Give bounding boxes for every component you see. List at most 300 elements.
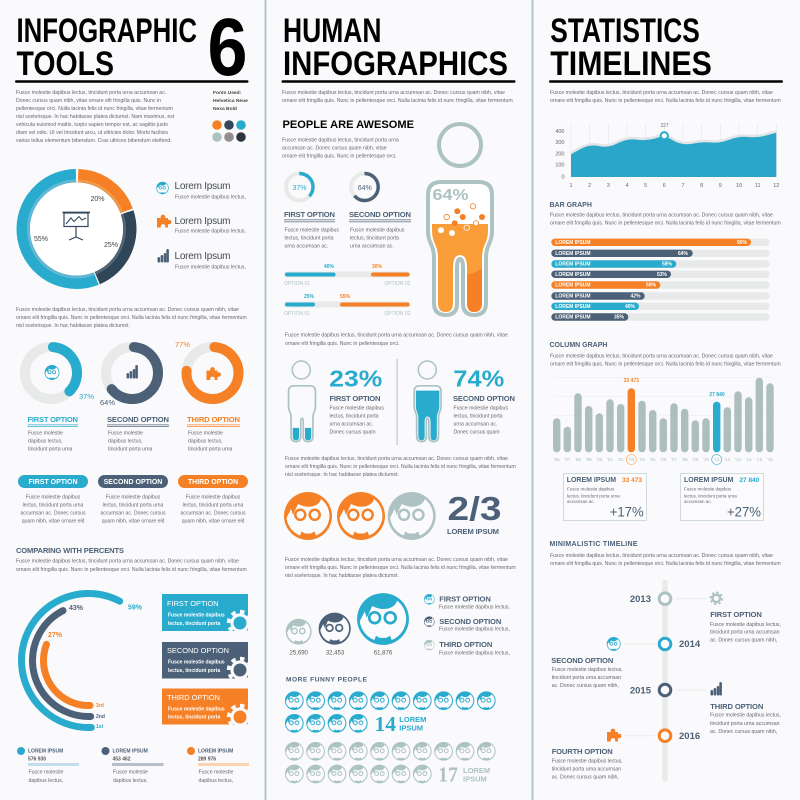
stat box: 33 473: Fusce molestie dapibus — [567, 487, 615, 492]
title: statistics timelines: STATISTICS — [550, 12, 700, 50]
count: 14: IPSUM — [399, 724, 423, 732]
progress bar 2: 25% — [304, 294, 315, 300]
progress bar 2: OPTION 01 — [284, 311, 310, 317]
column graph: '97 — [564, 457, 571, 462]
timeline entry: first option — [710, 610, 781, 644]
timeline entry: second option: ac. Donec cursus quam nibh, — [552, 683, 619, 689]
title: statistics timelines — [549, 12, 783, 83]
column graph: '03 — [628, 457, 635, 462]
stat: 23%: Donec cursus quam — [330, 429, 376, 435]
option text: lectus, tincidunt porta — [350, 236, 399, 242]
radial labels: 1st — [96, 724, 104, 730]
text block: Fusce molestie dapibus lectus, tincidunt porta urna accumsan ac. Donec cursus quam nibh, vitae — [285, 456, 508, 462]
area chart: 200 — [555, 152, 564, 158]
column graph — [553, 378, 774, 464]
option text: dapibus lectus, — [28, 439, 63, 445]
stat box: 27 840: lectus, tincidunt porta urna — [684, 493, 737, 498]
bar graph: LOREM IPSUM — [555, 283, 591, 289]
timeline axis — [625, 580, 706, 782]
area chart: 2 — [588, 183, 591, 189]
count: 17 — [438, 762, 490, 786]
area chart — [555, 123, 779, 189]
timeline entry: second option: SECOND OPTION — [551, 656, 613, 665]
stat: 74%: Fusce molestie dapibus — [454, 405, 508, 411]
option text — [284, 228, 405, 250]
count: 14 — [374, 712, 426, 736]
option box: first — [162, 594, 251, 634]
area chart: 300 — [555, 140, 564, 146]
column graph: '14 — [746, 457, 752, 462]
area chart: 12 — [773, 183, 779, 189]
pill text: lectus, tincidunt porta urna — [23, 503, 84, 509]
intro text: Fusce molestie dapibus lectus, tincidunt porta urna accumsan ac. Donec cursus quam nibh, vitae — [550, 90, 773, 96]
timeline entry: third option: Fusce molestie dapibus lectus, — [710, 713, 781, 719]
column graph text — [550, 354, 781, 368]
stat: 74% — [453, 366, 515, 435]
timeline entry: fourth option: Fusce molestie dapibus lectus, — [552, 759, 623, 765]
intro text: pellentesque orci. Nulla lacinia felis id nunc fringilla, vitae fermentum — [16, 106, 173, 112]
face legend: FIRST OPTION — [439, 595, 491, 604]
intro text: diam vel odio. Ut vel tincidunt arcu, ut ultricies dolor. Morbi facilisis — [16, 130, 168, 136]
pill text: quam nibh, vitae ornare elit — [182, 519, 245, 525]
icon: bars — [710, 682, 722, 696]
title: infographic tools: INFOGRAPHIC — [16, 12, 197, 50]
option box: second: SECOND OPTION — [167, 646, 229, 655]
area chart: 4 — [625, 183, 629, 189]
intro text: varius tellus elementum bibendum. Cras ultrices bibendum eleifend. — [16, 138, 172, 144]
timeline years: 2013 — [630, 594, 651, 605]
timeline entry: fourth option: FOURTH OPTION — [552, 747, 613, 756]
fonts used note — [213, 90, 248, 112]
stat: 23%: lectus, tincidunt porta — [330, 413, 379, 419]
pill text: Fusce molestie dapibus — [106, 495, 161, 501]
column graph: '00 — [596, 457, 603, 462]
stat: 74%: SECOND OPTION — [453, 394, 515, 403]
option box: first: FIRST OPTION — [167, 599, 219, 608]
stat box: 27 840: Fusce molestie dapibus — [684, 487, 732, 492]
donut labels: 25% — [104, 242, 118, 249]
timeline entry: fourth option: ac. Donec cursus quam nibh, — [552, 775, 619, 781]
area chart: 7 — [681, 183, 685, 189]
donut labels — [34, 196, 118, 249]
ring chart: third option — [175, 340, 241, 402]
face legend: SECOND OPTION — [439, 617, 501, 626]
bar graph: 64% — [678, 251, 689, 257]
column graph: '09 — [692, 457, 699, 462]
timeline entry: third option: ac. Donec cursus quam nibh, — [710, 729, 777, 735]
text block: nisl scelerisque. In hac habitasse platea dictumst. — [16, 323, 130, 329]
option pills: THIRD OPTION — [188, 479, 238, 486]
column graph: '99 — [586, 457, 592, 462]
stat: 74%: Donec cursus quam — [454, 429, 500, 435]
stat: 2/3 — [447, 490, 502, 536]
option text: Fusce molestie dapibus — [350, 228, 405, 234]
timeline entry: second option: Fusce molestie dapibus lectus, — [552, 667, 623, 673]
radial labels: 3rd — [96, 703, 104, 709]
option pills — [18, 475, 248, 488]
progress bar 1: 40% — [324, 264, 335, 270]
people text: ornare elit fringilla quis. Nunc in pellentesque orci. — [282, 154, 396, 160]
panel: human infographics — [282, 12, 516, 786]
person: first option — [289, 361, 315, 442]
panel: statistics timelines — [549, 12, 783, 782]
stat box: 33 473: LOREM IPSUM — [567, 477, 616, 484]
count: 17: IPSUM — [463, 774, 487, 784]
big number 6: 6 — [208, 2, 248, 93]
progress bar 2: 55% — [340, 294, 351, 300]
pill text: lectus, tincidunt porta urna — [183, 503, 244, 509]
donut chart — [6, 158, 147, 300]
title: infographic tools: TOOLS — [16, 45, 114, 83]
legend: Fusce molestie dapibus lectus, — [175, 264, 246, 270]
text block — [285, 557, 516, 579]
option box: first: Fusce molestie dapibus — [168, 613, 225, 619]
column graph: '04 — [639, 457, 645, 462]
column graph: '96 — [554, 457, 560, 462]
option text: urna accumsan ac. — [350, 244, 394, 250]
column graph: '16 — [767, 457, 773, 462]
text block: ornare elit fringilla quis. Nunc in pellentesque orci. Nulla lacinia felis id nunc fringilla, vitae fermentum — [285, 464, 516, 470]
pill text: Fusce molestie dapibus — [186, 495, 241, 501]
large person figure — [428, 124, 492, 320]
bar graph text: ornare elit fringilla quis. Nunc in pellentesque orci. Nulla lacinia felis id nunc fringilla, vitae fermentum — [550, 221, 781, 227]
stat box: 27 840: 27 840 — [739, 477, 760, 484]
faces: two of three — [284, 492, 436, 540]
ring chart: first option — [22, 344, 94, 402]
intro text — [550, 90, 781, 104]
intro text: Donec cursus quam nibh, vitae ornare elit fringilla quis. Nunc in — [16, 98, 161, 104]
option box: third: THIRD OPTION — [167, 693, 220, 702]
bar graph: 42% — [630, 294, 641, 300]
people text — [282, 138, 399, 160]
stats row: LOREM IPSUM — [112, 749, 148, 755]
timeline entry: third option: tincidunt porta urna accumsan — [710, 721, 780, 727]
option box: second — [162, 642, 251, 681]
face size comparison: 61,876 — [374, 650, 393, 656]
timeline text — [550, 553, 781, 567]
option headings: SECOND OPTION — [107, 415, 169, 424]
pill text: lectus, tincidunt porta urna — [103, 503, 164, 509]
pill text: quam nibh, vitae ornare elit — [102, 519, 165, 525]
timeline years: 2014 — [679, 639, 701, 650]
column graph text: ornare elit fringilla quis. Nunc in pellentesque orci. Nulla lacinia felis id nunc fringilla, vitae fermentum — [550, 362, 781, 368]
column graph: '12 — [724, 457, 731, 462]
stats row: LOREM IPSUM — [28, 749, 63, 755]
radial labels: 27% — [48, 632, 63, 639]
option text — [28, 431, 233, 453]
face legend: THIRD OPTION — [439, 640, 492, 649]
text block — [285, 333, 508, 347]
icon: puzzle — [607, 729, 621, 742]
title: human infographics: INFOGRAPHICS — [283, 45, 508, 83]
radial labels: 43% — [69, 605, 84, 612]
option text: urna accumsan ac. — [284, 244, 328, 250]
option pills: FIRST OPTION — [28, 479, 78, 486]
option text: Fusce molestie dapibus — [284, 228, 339, 234]
text block — [285, 456, 516, 478]
pill text: quam nibh, vitae ornare elit — [22, 519, 85, 525]
intro text: vehicula euismod mattis, turpis sapien tempor est, ac sagittis justo — [16, 122, 168, 128]
bubbles — [438, 204, 485, 236]
heading: more funny people: MORE FUNNY PEOPLE — [286, 677, 368, 684]
people text: accumsan ac. Donec cursus quam nibh, vitae — [282, 146, 387, 152]
progress bar 1: OPTION 02 — [384, 281, 411, 287]
face size comparison: 25,690 — [290, 650, 309, 656]
bar graph: 50% — [646, 283, 657, 289]
option text: Fusce molestie — [28, 431, 63, 437]
title: infographic tools — [15, 12, 248, 83]
pill text — [20, 495, 246, 525]
column graph: '06 — [660, 457, 667, 462]
heading: people are awesome: PEOPLE ARE AWESOME — [282, 119, 414, 131]
bar graph: LOREM IPSUM — [555, 251, 591, 257]
heading: column graph: COLUMN GRAPH — [550, 342, 607, 349]
small ring: 64% — [351, 174, 378, 200]
column graph: '11 — [714, 457, 720, 462]
area chart: 3 — [607, 183, 610, 189]
bar graph: 40% — [625, 304, 636, 310]
area chart: 1 — [569, 183, 573, 189]
stat: 23%: urna accumsan ac. — [330, 421, 373, 427]
option text: tincidunt porta urna — [28, 447, 73, 453]
stat box: 27 840: accumsan ac. — [684, 499, 712, 504]
text block: nisl scelerisque. In hac habitasse platea dictumst. — [285, 573, 399, 579]
text block: ornare elit fringilla quis. Nunc in pellentesque orci. Nulla lacinia felis id nunc fringilla, vitae fermentum — [285, 565, 516, 571]
area chart: 10 — [736, 183, 742, 189]
bar graph: 35% — [614, 315, 625, 321]
area chart: 8 — [700, 183, 703, 189]
column graph: '13 — [735, 457, 741, 462]
bar graph: LOREM IPSUM — [555, 272, 591, 278]
blue face grid — [285, 691, 496, 733]
timeline text: ornare elit fringilla quis. Nunc in pellentesque orci. Nulla lacinia felis id nunc fringilla, vitae fermentum — [550, 561, 781, 567]
small ring: 37%: 37% — [292, 185, 307, 192]
stats row: Fusce molestie — [198, 770, 233, 776]
stats row: 576 930 — [28, 756, 46, 762]
radial labels — [48, 604, 143, 730]
option headings: SECOND OPTION — [349, 210, 411, 219]
legend: Lorem Ipsum — [174, 181, 230, 192]
option text: Fusce molestie — [188, 431, 223, 437]
option pills: SECOND OPTION — [104, 479, 162, 486]
fonts used note: Fonts Used: — [213, 90, 242, 96]
comparing text — [16, 559, 247, 573]
timeline entry: fourth option — [552, 747, 623, 781]
stats row — [17, 747, 249, 784]
timeline years — [630, 594, 701, 742]
text block: Fusce molestie dapibus lectus, tincidunt porta urna accumsan ac. Donec cursus quam nibh, vitae — [285, 557, 508, 563]
bar graph: 58% — [662, 262, 673, 268]
count: 17: 17 — [438, 762, 458, 786]
donut labels: 55% — [34, 236, 48, 243]
text block: nisl scelerisque. In hac habitasse platea dictumst. — [285, 472, 399, 478]
fonts used note: Nexa Bold — [213, 106, 237, 112]
area chart: 5 — [644, 183, 647, 189]
face size comparison — [286, 593, 409, 656]
face legend: Fusce molestie dapibus lectus, — [439, 627, 510, 633]
large person figure: 64% — [432, 187, 468, 204]
timeline entry: fourth option: tincidunt porta urna accumsan — [552, 767, 621, 773]
option box: first: lectus, tincidunt porta — [168, 621, 220, 627]
option text: dapibus lectus, — [108, 439, 143, 445]
stats row: 289 976 — [198, 756, 216, 762]
grey face grid — [285, 742, 496, 783]
stats row: dapibus lectus, — [198, 778, 233, 784]
count: 14: LOREM — [399, 715, 426, 724]
radial bars — [19, 591, 158, 730]
stat box: 33 473: +17% — [610, 504, 644, 520]
face size comparison: 32,453 — [326, 650, 345, 656]
column graph: '15 — [756, 457, 763, 462]
title: human infographics — [282, 12, 516, 83]
legend: Lorem Ipsum — [174, 216, 230, 227]
intro text: ornare elit fringilla quis. Nunc in pellentesque orci. Nulla lacinia felis id nunc fringilla, vitae fermentum — [282, 98, 513, 104]
text block: Fusce molestie dapibus lectus, tincidunt porta urna accumsan ac. Donec cursus quam nibh, vitae — [285, 333, 508, 339]
text block: ornare elit fringilla quis. Nunc in pellentesque orci. — [285, 341, 399, 347]
progress bar 2 — [284, 294, 411, 317]
area chart: 100 — [555, 163, 564, 169]
timeline entry: third option: THIRD OPTION — [710, 702, 763, 711]
intro text: Fusce molestie dapibus lectus, tincidunt porta urna accumsan ac. — [16, 90, 166, 96]
colour swatches — [212, 120, 246, 142]
face legend: Fusce molestie dapibus lectus, — [439, 605, 510, 611]
option text: Fusce molestie — [108, 431, 143, 437]
stat: 74%: 74% — [453, 366, 504, 392]
option box: third — [162, 688, 251, 728]
option text: lectus, tincidunt porta — [284, 236, 334, 242]
option headings: FIRST OPTION — [284, 210, 335, 219]
option box: third: lectus, tincidunt porta — [168, 715, 220, 721]
small ring: 37% — [286, 174, 313, 200]
legend: Fusce molestie dapibus lectus, — [175, 195, 246, 201]
panel: infographic tools — [6, 2, 251, 784]
area chart: 327 — [660, 123, 669, 129]
timeline entry: first option: FIRST OPTION — [710, 610, 762, 619]
ring chart: third option: 77% — [175, 340, 190, 349]
progress bar 1: OPTION 01 — [284, 281, 310, 287]
area chart: 9 — [719, 183, 722, 189]
title: statistics timelines: TIMELINES — [550, 45, 712, 83]
column graph text: Fusce molestie dapibus lectus, tincidunt porta urna accumsan ac. Donec cursus quam nibh, vitae — [550, 354, 773, 360]
text block: Fusce molestie dapibus lectus, tincidunt porta urna accumsan ac. Donec cursus quam nibh, vitae — [16, 307, 239, 313]
stat: 23% — [329, 366, 384, 435]
people text: Fusce molestie dapibus lectus, tincidunt porta urna — [282, 138, 399, 144]
text block: ornare elit fringilla quis. Nunc in pellentesque orci. Nulla lacinia felis id nunc fringilla, vitae fermentum — [16, 315, 247, 321]
stat box: 33 473: lectus, tincidunt porta urna — [567, 493, 620, 498]
small ring: 64%: 64% — [358, 185, 372, 192]
timeline entry: second option — [551, 656, 623, 689]
timeline entry: first option: tincidunt porta urna accumsan — [710, 630, 780, 636]
heading: bar graph: BAR GRAPH — [550, 202, 592, 209]
column graph: '07 — [671, 457, 677, 462]
ring chart: second option — [100, 344, 161, 407]
intro text: Fusce molestie dapibus lectus, tincidunt porta urna accumsan ac. Donec cursus quam nibh, vitae — [282, 90, 505, 96]
stat box: 33 473 — [564, 474, 646, 520]
option text: tincidunt porta urna — [188, 447, 233, 453]
area chart: 6 — [663, 183, 666, 189]
title: human infographics: HUMAN — [283, 12, 382, 50]
comparing text: ornare elit fringilla quis. Nunc in pellentesque orci. Nulla lacinia felis id nunc fringilla, vitae fermentum — [16, 567, 247, 573]
area chart: 11 — [755, 183, 761, 189]
stat: 74%: urna accumsan ac. — [454, 421, 497, 427]
intro text: ornare elit fringilla quis. Nunc in pellentesque orci. Nulla lacinia felis id nunc fringilla, vitae fermentum — [550, 98, 781, 104]
timeline years: 2015 — [630, 686, 652, 697]
face legend — [424, 594, 510, 657]
radial labels: 59% — [128, 604, 143, 612]
pill text: accumsan ac. Donec cursus — [20, 511, 86, 517]
bar graph — [551, 239, 770, 321]
stats row: Fusce molestie — [28, 770, 63, 776]
stats row: LOREM IPSUM — [198, 749, 233, 755]
person: second option — [414, 361, 441, 442]
timeline entry: first option: Fusce molestie dapibus lectus, — [710, 622, 781, 628]
pill text: Fusce molestie dapibus — [26, 495, 81, 501]
column graph: 33 473 — [624, 378, 639, 384]
icon: presentation board — [62, 212, 90, 240]
icon: gear — [710, 592, 722, 604]
column graph: '10 — [703, 457, 709, 462]
stat box: 27 840: +27% — [727, 504, 761, 520]
stat: 2/3: LOREM IPSUM — [447, 527, 499, 536]
text block — [16, 307, 247, 329]
intro text — [16, 90, 175, 144]
bar graph text — [550, 213, 781, 227]
heading: minimalistic timeline: MINIMALISTIC TIMELINE — [550, 541, 638, 548]
stat box: 27 840 — [680, 474, 764, 520]
column graph: '05 — [650, 457, 656, 462]
legend: Fusce molestie dapibus lectus, — [175, 228, 246, 234]
intro text — [282, 90, 513, 104]
pill text: accumsan ac. Donec cursus — [100, 511, 166, 517]
stats row: dapibus lectus, — [28, 778, 63, 784]
bar graph text: Fusce molestie dapibus lectus, tincidunt porta urna accumsan ac. Donec cursus quam nibh, vitae — [550, 213, 773, 219]
column graph: 27 840 — [709, 392, 725, 398]
stat box: 33 473: accumsan ac. — [567, 499, 595, 504]
face legend: Fusce molestie dapibus lectus, — [439, 651, 510, 657]
area chart: 0 — [561, 175, 564, 181]
timeline entry: first option: ac. Donec cursus quam nibh, — [710, 638, 777, 644]
legend — [156, 181, 246, 270]
stats row: Fusce molestie — [113, 770, 148, 776]
bar graph: LOREM IPSUM — [555, 240, 591, 246]
column graph: '98 — [575, 457, 581, 462]
option box: second: Fusce molestie dapibus — [168, 660, 225, 666]
option box: third: Fusce molestie dapibus — [168, 707, 225, 713]
option text: dapibus lectus, — [188, 439, 223, 445]
pill text: accumsan ac. Donec cursus — [180, 511, 246, 517]
progress bar 2: OPTION 02 — [384, 311, 411, 317]
option headings — [284, 210, 411, 222]
stat: 23%: Fusce molestie dapibus — [330, 405, 384, 411]
stat: 23%: FIRST OPTION — [330, 394, 380, 403]
icon: face — [607, 637, 621, 651]
bar graph: 53% — [657, 272, 668, 278]
option box: second: lectus, tincidunt porta — [168, 668, 220, 674]
bar graph: LOREM IPSUM — [555, 315, 591, 321]
column graph: '02 — [618, 457, 624, 462]
option headings — [28, 415, 240, 427]
intro text: nisl scelerisque. In hac habitasse platea dictumst. Nam maximus, est — [16, 114, 175, 120]
stat: 23%: 23% — [329, 366, 382, 392]
heading: comparing with percents: COMPARING WITH PERCENTS — [16, 546, 124, 555]
progress bar 1: 30% — [372, 264, 383, 270]
ring chart: first option: 37% — [79, 392, 94, 401]
radial labels: 2nd — [96, 714, 105, 720]
bar graph: LOREM IPSUM — [555, 304, 591, 310]
stat: 74%: lectus, tincidunt porta — [454, 413, 503, 419]
stats row: 453 462 — [112, 756, 131, 762]
area chart: 400 — [555, 129, 564, 135]
